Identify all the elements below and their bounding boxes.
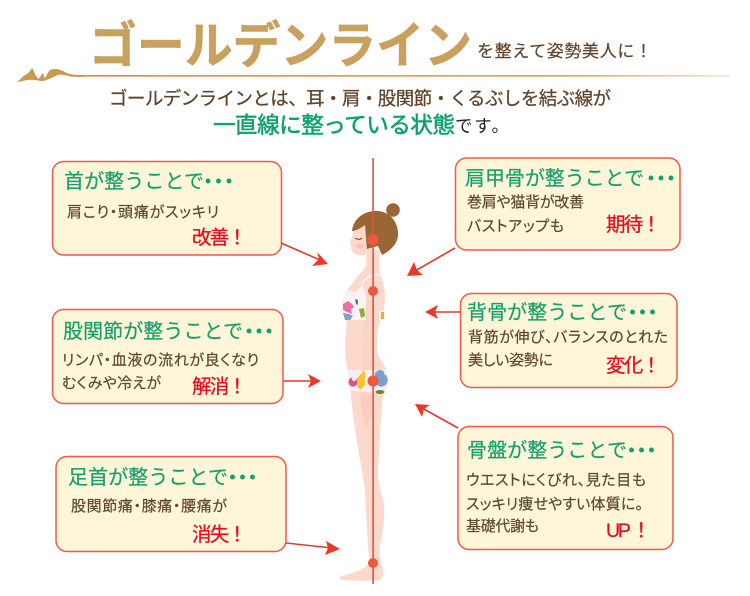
blush	[356, 244, 364, 248]
hip joint result: 解消！	[192, 376, 247, 398]
hip joint text: リンパ・血液の流れが良くなり	[62, 352, 259, 369]
marker: ankle	[368, 558, 378, 568]
hair bun	[386, 203, 400, 217]
intro line 1: ゴールデンラインとは、耳・肩・股関節・くるぶしを結ぶ線が	[109, 88, 611, 109]
spine heading dots: ・・・	[623, 303, 662, 324]
arm	[360, 300, 374, 427]
shoulder blade text: 巻肩や猫背が改善	[467, 194, 584, 211]
ankle text: 股関節痛・膝痛・腰痛が	[71, 498, 227, 515]
arrow: pelvis	[415, 404, 458, 428]
marker: shoulder	[368, 286, 378, 296]
spine text: 背筋が伸び、バランスのとれた	[468, 329, 668, 346]
shoulder blade heading: 肩甲骨が整うことで	[465, 167, 644, 190]
intro line 2: highlight: 一直線に整っている状態	[213, 113, 455, 138]
panel: spine: 美しい姿勢に	[468, 352, 553, 369]
body	[339, 250, 387, 581]
ankle heading: 足首が整うことで	[68, 466, 228, 489]
ankle heading dots: ・・・	[223, 468, 262, 489]
panel: pelvis	[458, 426, 673, 550]
bra	[342, 275, 385, 320]
neck text: 肩こり・頭痛がスッキリ	[67, 204, 219, 221]
arrow: shoulder blade	[407, 248, 455, 276]
panel: hip joint	[52, 310, 283, 404]
shorts	[348, 370, 388, 394]
title: ゴールデンライン	[89, 18, 472, 74]
panel: hip joint: むくみや冷えが	[62, 375, 161, 392]
shoulder blade heading dots: ・・・	[642, 169, 681, 190]
marker: hip	[368, 376, 378, 386]
neck result: 改善！	[192, 227, 247, 249]
ankle result: 消失！	[192, 524, 247, 546]
eye	[355, 238, 362, 240]
arrow: neck	[281, 243, 328, 266]
panel: pelvis: 基礎代謝も	[466, 518, 539, 535]
pelvis text: ウエストにくびれ、見た目も	[466, 472, 646, 489]
arrow: ankle	[286, 541, 340, 555]
hip joint heading: 股関節が整うことで	[63, 320, 243, 343]
pelvis heading dots: ・・・	[622, 441, 661, 462]
hair	[352, 211, 398, 255]
panel: shoulder blade: バストアップも	[467, 218, 564, 235]
neck heading: 首が整うことで	[64, 170, 204, 193]
arrow: hip joint	[283, 374, 321, 388]
panel: spine	[460, 294, 677, 388]
panel: ankle	[56, 456, 286, 552]
hand	[361, 394, 372, 427]
intro line 2: ending: です。	[455, 116, 509, 136]
spine heading: 背骨が整うことで	[467, 301, 627, 324]
shoulder blade result: 期待！	[606, 214, 661, 236]
panel: pelvis: スッキリ痩せやすい体質に。	[466, 495, 643, 513]
pelvis result: UP ！	[606, 520, 651, 542]
subtitle: を整えて姿勢美人に！	[477, 42, 652, 61]
spine result: 変化！	[606, 355, 661, 377]
panel: neck	[52, 162, 282, 255]
arrow: spine	[425, 305, 460, 319]
pelvis heading: 骨盤が整うことで	[467, 439, 627, 462]
face	[350, 222, 376, 255]
figure: standing woman in profile	[339, 203, 400, 581]
marker: ear	[368, 234, 378, 246]
golden line	[368, 158, 378, 584]
neck heading dots: ・・・	[198, 172, 239, 193]
decorative title rule	[17, 68, 730, 82]
panel: shoulder blade	[456, 158, 681, 250]
hip joint heading dots: ・・・	[240, 322, 279, 343]
